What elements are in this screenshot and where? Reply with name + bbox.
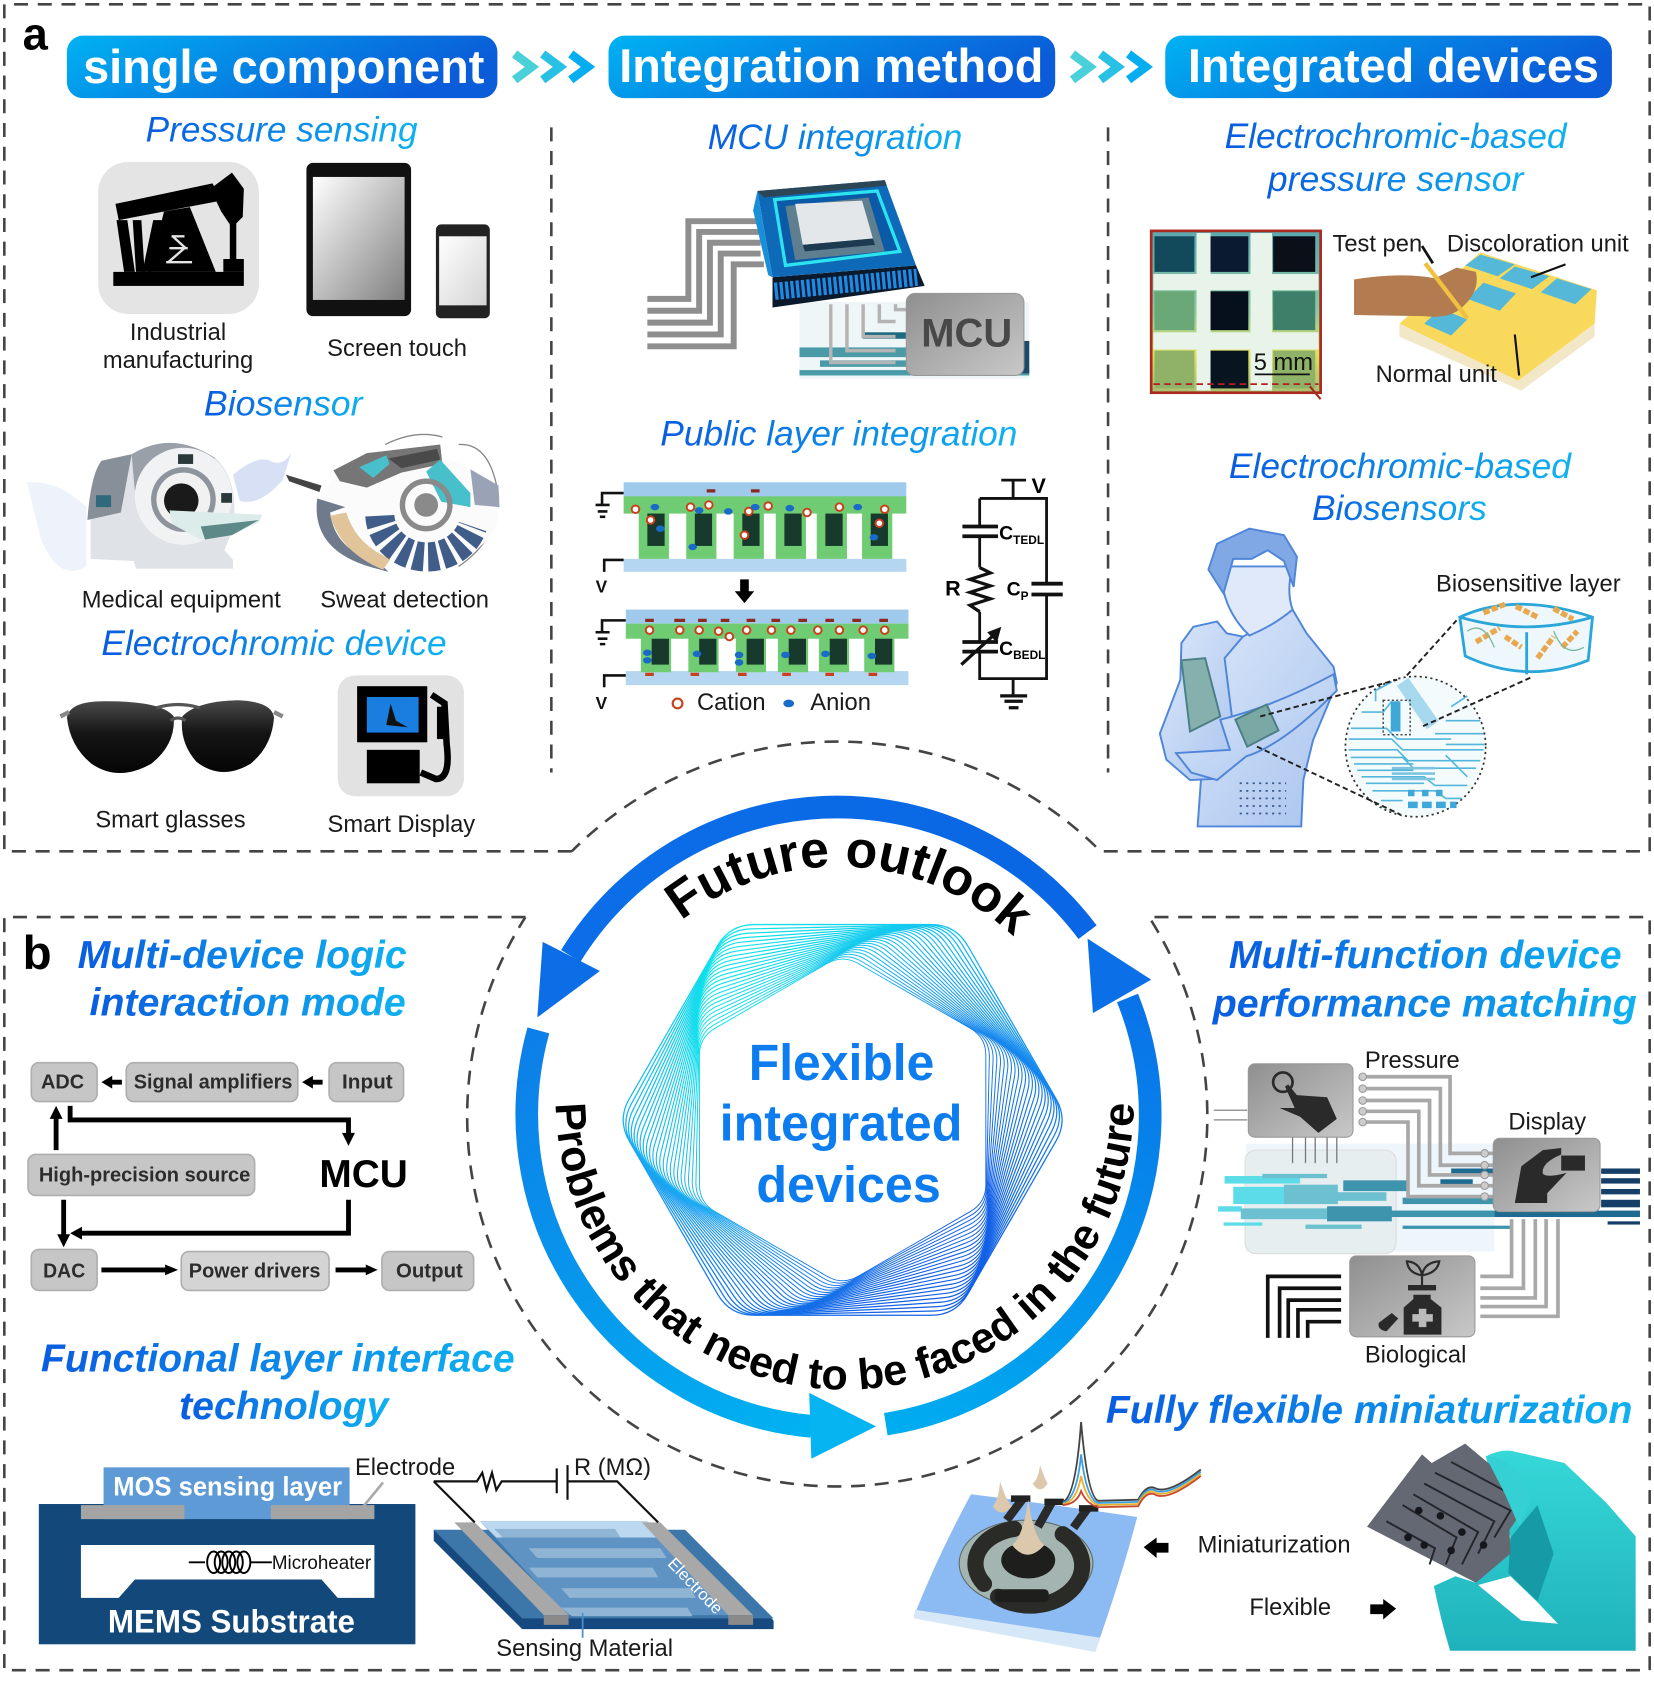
heading: multi-device logic — [78, 934, 407, 1024]
caption: screen touch: Screen touch — [327, 336, 467, 362]
flow diagram: logic interaction — [28, 1063, 474, 1290]
diagram: equivalent circuit: BEDL — [1013, 648, 1045, 662]
caption: smart glasses: Smart glasses — [95, 808, 246, 834]
label: biosensitive layer: Biosensitive layer — [1436, 571, 1621, 597]
legend: cation and anion: Cation — [697, 690, 766, 716]
header: single component: single component — [83, 41, 485, 94]
caption: sweat detection: Sweat detection — [320, 587, 489, 613]
legend: cation and anion: Anion — [810, 690, 871, 716]
diagram: MEMS substrate: MOS sensing layer — [113, 1471, 342, 1501]
heading: functional layer interface — [41, 1337, 515, 1428]
caption: industrial manufacturing: manufacturing — [103, 348, 253, 374]
center title: devices — [756, 1156, 941, 1213]
diagram: equivalent circuit: C — [999, 638, 1013, 660]
flow diagram: logic interaction: DAC — [43, 1259, 85, 1282]
arrow: miniaturization — [1144, 1537, 1168, 1558]
arrow: top arc future outlook — [537, 807, 1088, 1017]
flow diagram: logic interaction: Power drivers — [189, 1259, 320, 1282]
diagram: equivalent circuit: TEDL — [1013, 533, 1044, 547]
heading: multi-device logic: interaction mode — [90, 981, 406, 1024]
illustration: hand with test pen on board — [1354, 246, 1597, 391]
heading: electrochromic-based pressure sensor: pressure sensor — [1267, 159, 1526, 199]
center title — [720, 1034, 962, 1213]
heading: pressure sensing: Pressure sensing — [146, 109, 418, 149]
center title: integrated — [720, 1094, 962, 1151]
diagram: equivalent circuit: P — [1021, 589, 1029, 603]
heading: fully flexible miniaturization: Fully flexible miniaturization — [1106, 1389, 1632, 1432]
heading: biosensor: Biosensor — [204, 383, 365, 423]
arrow: down — [735, 579, 754, 603]
icon: phone — [436, 224, 490, 318]
diagram: equivalent circuit: R — [945, 576, 961, 601]
arrow chevrons 2 — [1072, 54, 1146, 80]
heading: electrochromic-based biosensors: Biosensors — [1312, 488, 1487, 528]
legend: cation and anion — [673, 690, 871, 716]
heading: multi-function device — [1212, 934, 1637, 1025]
image: MCU chip and traces — [647, 180, 1029, 379]
heading: electrochromic-based pressure sensor — [1225, 116, 1568, 199]
label: test pen: Test pen — [1332, 231, 1422, 257]
panel a frame — [4, 4, 1650, 851]
arrow: flexible — [1370, 1599, 1396, 1619]
illustration: human with sensors — [1160, 529, 1337, 826]
heading: functional layer interface: Functional layer interface — [41, 1337, 515, 1380]
label: electrode: Electrode — [355, 1455, 455, 1481]
heading: multi-function device: performance matching — [1212, 982, 1637, 1025]
curved text: problems: Problems that need to be faced in the future — [556, 1104, 1134, 1390]
center: spiral hexagon — [615, 907, 1070, 1333]
label a: a — [23, 9, 49, 60]
diagram: equivalent circuit: V — [1031, 473, 1046, 498]
label: flexible: Flexible — [1249, 1595, 1331, 1621]
diagram: MEMS substrate: Microheater — [272, 1552, 372, 1574]
label: miniaturization: Miniaturization — [1198, 1533, 1351, 1559]
label: pressure: Pressure — [1365, 1048, 1460, 1074]
flow diagram: logic interaction: High-precision source — [39, 1163, 250, 1186]
center title: Flexible — [749, 1034, 934, 1091]
icon: ground and voltage terminals — [596, 493, 626, 713]
heading: MCU integration: MCU integration — [708, 117, 962, 157]
arrow chevrons 1 — [515, 54, 588, 80]
label: biological: Biological — [1365, 1343, 1466, 1369]
diagram: interdigital electrode — [434, 1465, 774, 1638]
heading: multi-device logic: Multi-device logic — [78, 934, 407, 977]
icon: ground and voltage terminals: V — [596, 693, 608, 713]
image: MCU chip and traces: MCU — [921, 311, 1012, 355]
flow diagram: logic interaction: ADC — [41, 1071, 84, 1094]
heading: electrochromic-based pressure sensor: Electrochromic-based — [1225, 116, 1568, 156]
diagram: MEMS substrate: MEMS Substrate — [108, 1603, 355, 1639]
caption: industrial manufacturing: Industrial — [130, 320, 226, 346]
label: sensing material: Sensing Material — [496, 1636, 673, 1662]
arrow: lower left arc — [527, 1030, 876, 1459]
callout: circuit magnifier — [1345, 676, 1486, 817]
label b: b — [23, 927, 52, 980]
caption: smart display: Smart Display — [328, 812, 475, 838]
illustration: biosensitive layer cube — [1460, 604, 1592, 674]
diagram: equivalent circuit: C — [999, 522, 1013, 544]
heading: electrochromic device: Electrochromic device — [101, 623, 447, 663]
header: integrated devices: Integrated devices — [1188, 40, 1599, 93]
divider right — [1107, 127, 1109, 773]
diagram: lower ion layer — [626, 610, 908, 685]
header: integration method: Integration method — [619, 40, 1043, 93]
photo: electrochromic grid — [1151, 231, 1321, 399]
icon: tablet — [306, 163, 411, 316]
arrow: right arc — [886, 939, 1151, 1424]
label: R (MOhm): R (MΩ) — [574, 1455, 651, 1481]
icon: industrial manufacturing — [98, 162, 259, 314]
heading: electrochromic-based biosensors: Electrochromic-based — [1229, 446, 1572, 486]
curved text: future outlook: Future outlook — [664, 840, 1031, 936]
caption: industrial manufacturing — [103, 320, 253, 374]
label: normal unit: Normal unit — [1376, 362, 1497, 388]
label: discoloration unit: Discoloration unit — [1447, 231, 1629, 257]
divider left — [550, 127, 553, 773]
heading: functional layer interface: technology — [179, 1385, 391, 1428]
icon: ground and voltage terminals: V — [596, 576, 608, 596]
caption: medical equipment: Medical equipment — [82, 587, 281, 613]
illustration: miniaturized sensor — [914, 1422, 1201, 1652]
flow diagram: logic interaction: Input — [342, 1071, 393, 1094]
flow diagram: logic interaction: Signal amplifiers — [134, 1071, 292, 1094]
image: medical equipment MRI — [27, 443, 291, 571]
illustration: gloved hand with flexible circuit — [1367, 1444, 1636, 1651]
label: display: Display — [1508, 1110, 1586, 1136]
image: sweat detection device — [286, 434, 500, 572]
icon: smart display pump — [338, 675, 464, 796]
diagram: equivalent circuit: C — [1007, 579, 1021, 601]
diagram: upper ion layer — [624, 482, 906, 572]
heading: public layer integration: Public layer integration — [660, 414, 1017, 454]
diagram: interdigital electrode: Electrode — [664, 1554, 727, 1618]
connector lines to magnifier — [1257, 620, 1533, 815]
flow diagram: logic interaction: Output — [396, 1259, 463, 1282]
diagram: equivalent circuit — [945, 473, 1063, 708]
diagram: multi-function chips — [1214, 1064, 1640, 1338]
icon: smart glasses — [60, 700, 283, 773]
photo: electrochromic grid: 5 mm — [1254, 350, 1313, 376]
panel b frame — [4, 917, 1650, 1670]
heading: multi-function device: Multi-function device — [1229, 934, 1622, 977]
heading: electrochromic-based biosensors — [1229, 446, 1572, 528]
flow diagram: logic interaction: MCU — [319, 1153, 408, 1196]
diagram: MEMS substrate — [39, 1467, 415, 1644]
